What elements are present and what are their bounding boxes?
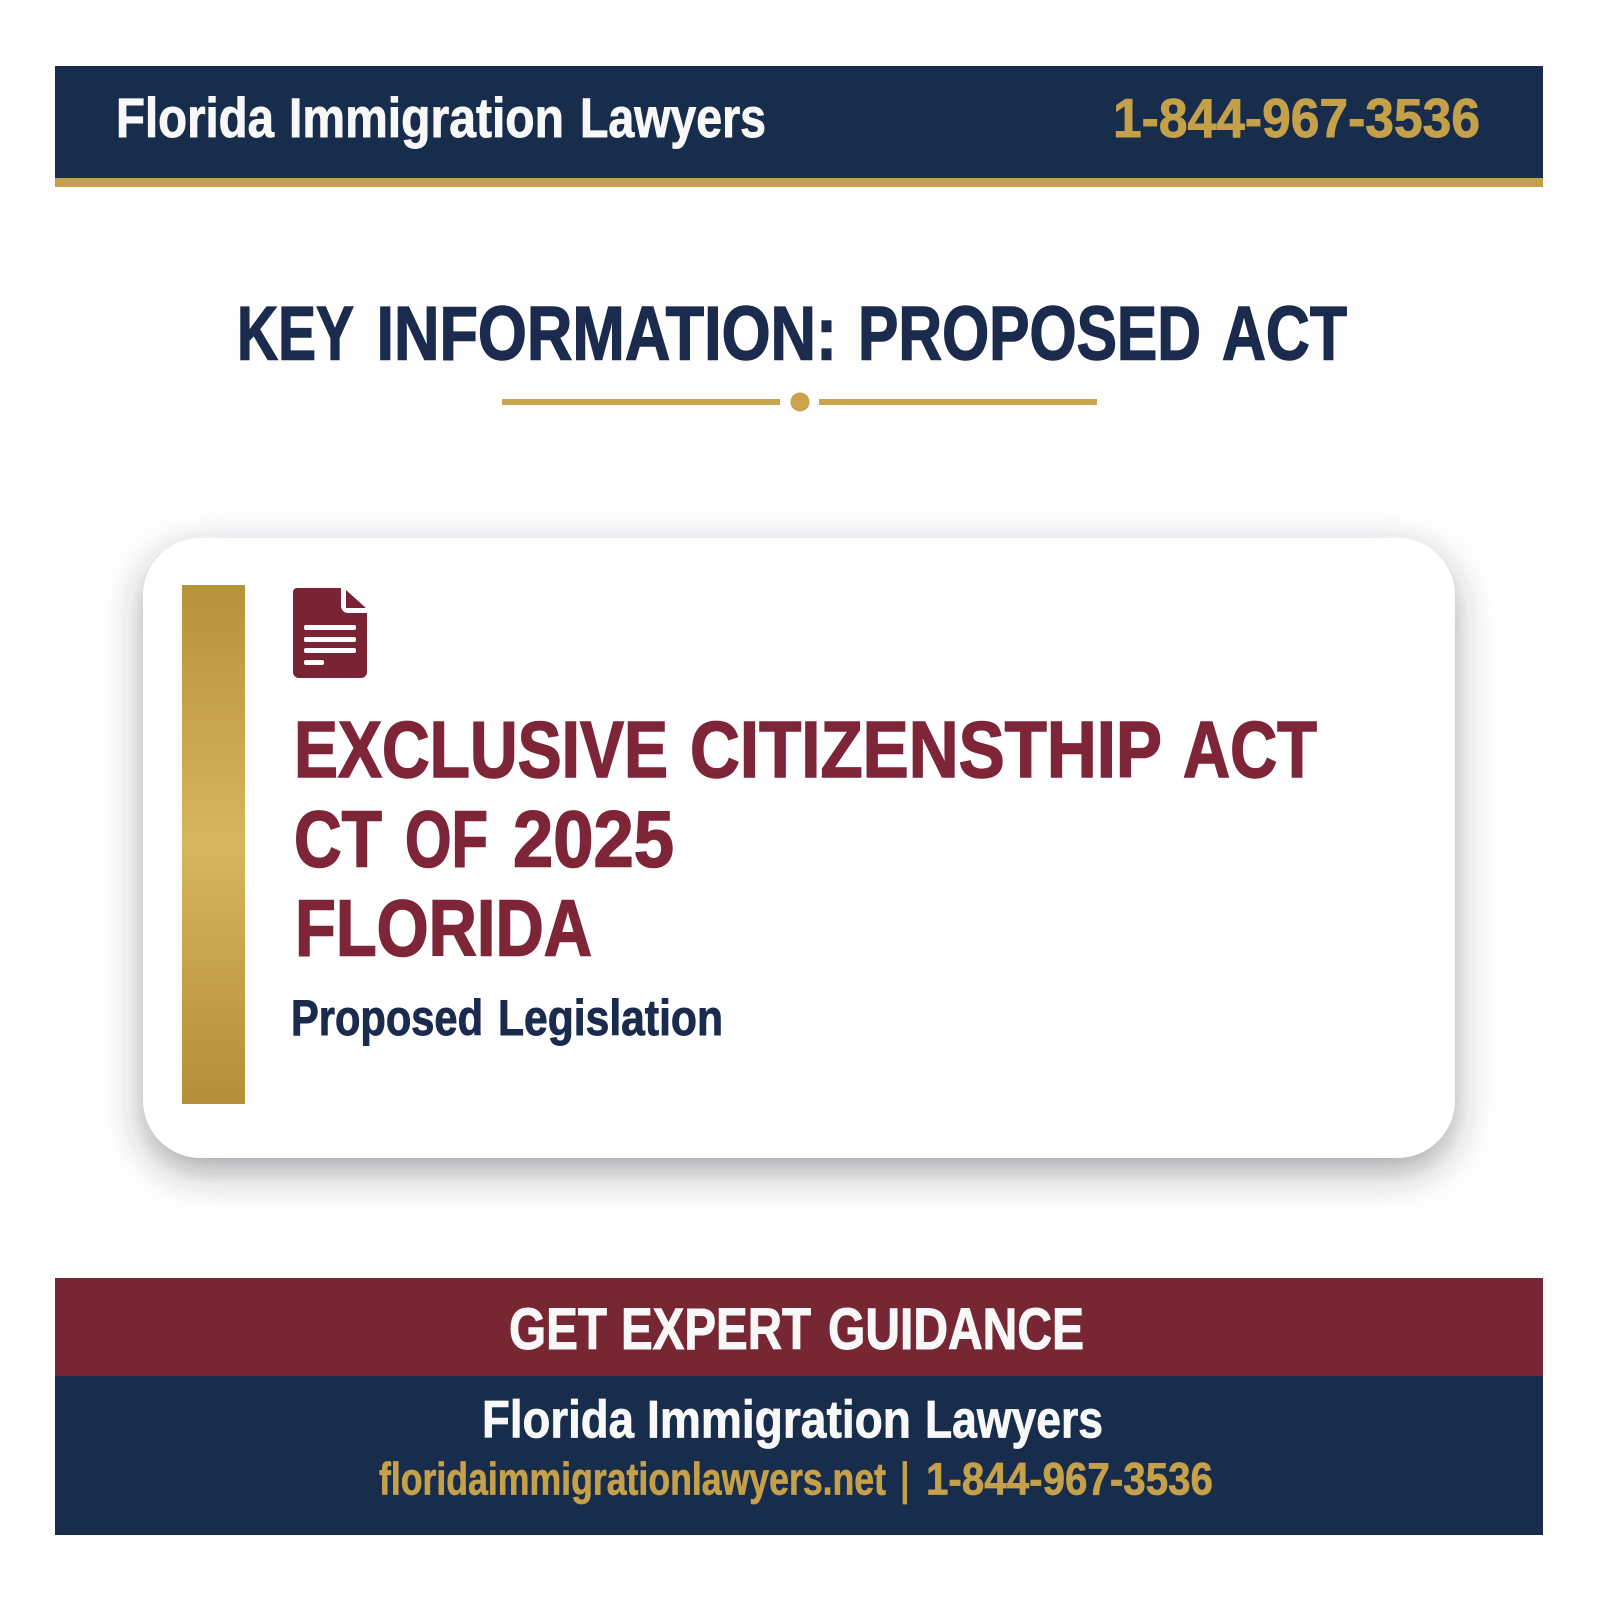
section title: KEY [237, 292, 354, 376]
gold accent bar [182, 585, 245, 1104]
section title: INFORMATION: [376, 292, 837, 376]
call to action heading: GUIDANCE [828, 1297, 1084, 1362]
act name: OF [405, 794, 488, 884]
footer firm name [482, 1390, 1103, 1450]
act name [294, 705, 1317, 972]
act name: CITIZENSTHIP [690, 705, 1162, 794]
act name: EXCLUSIVE [294, 705, 668, 794]
footer contact line: 1-844-967-3536 [926, 1454, 1213, 1504]
footer contact line: floridaimmigrationlawyers.net [379, 1454, 886, 1504]
header phone number: 1-844-967-3536 [1113, 87, 1480, 149]
act name: 2025 [513, 794, 674, 884]
status label [291, 990, 723, 1046]
icon: document [293, 588, 367, 678]
header firm name: Immigration [289, 86, 564, 149]
footer contact line: | [899, 1454, 911, 1504]
call to action heading: GET [509, 1297, 607, 1362]
section title: ACT [1222, 292, 1347, 376]
title divider [502, 392, 1097, 412]
footer firm name: Immigration [647, 1390, 911, 1450]
footer call to action [55, 1278, 1543, 1535]
panel: act card [143, 538, 1455, 1158]
footer firm name: Florida [482, 1390, 634, 1450]
header firm name [116, 86, 766, 149]
act name: CT [294, 794, 382, 884]
header firm name: Lawyers [580, 86, 766, 149]
section title [237, 292, 1347, 376]
act name: FLORIDA [295, 884, 592, 972]
call to action heading [509, 1297, 1084, 1362]
act name: ACT [1183, 705, 1317, 794]
status label: Proposed [291, 990, 483, 1046]
call to action heading: EXPERT [621, 1297, 811, 1362]
status label: Legislation [498, 990, 723, 1046]
footer firm name: Lawyers [925, 1390, 1103, 1450]
header banner [55, 66, 1543, 187]
section title: PROPOSED [858, 292, 1201, 376]
header firm name: Florida [116, 86, 275, 149]
